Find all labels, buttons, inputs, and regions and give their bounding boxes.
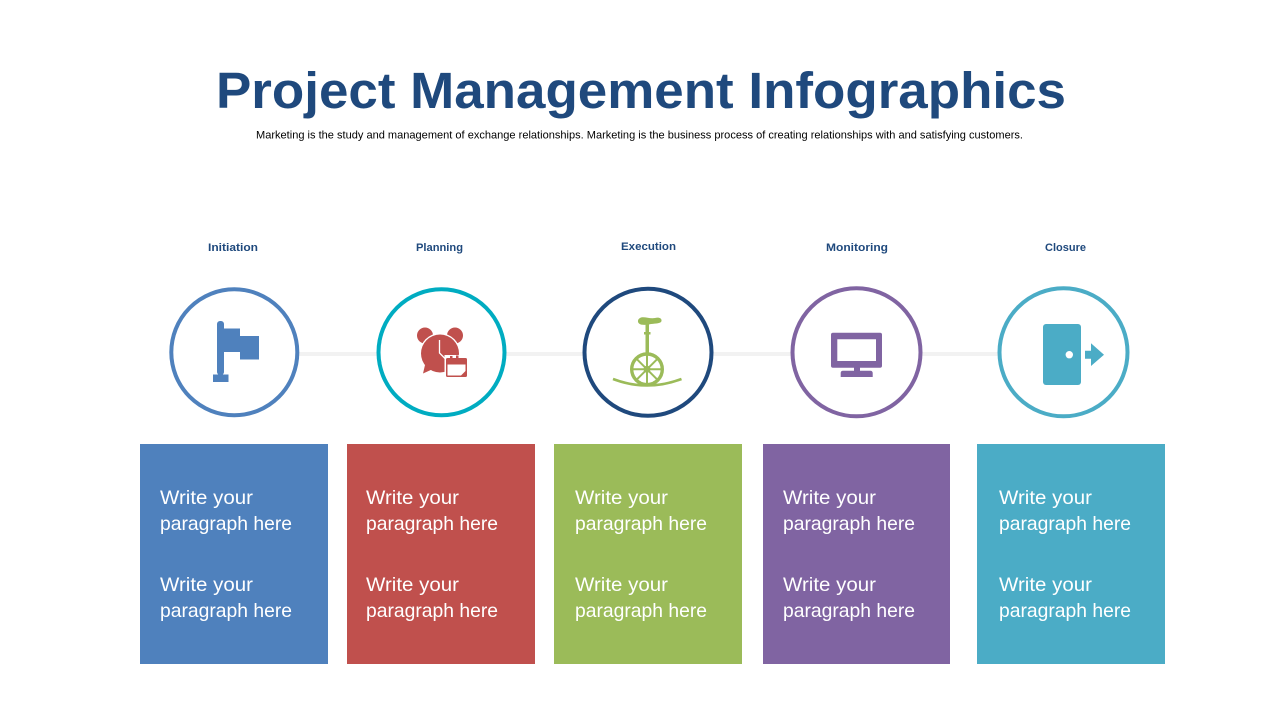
subtitle: Marketing is the study and management of exchange relationships. Marketing is the business process of creating relationships with and satisfying customers. (256, 130, 1023, 142)
card: Initiation (140, 444, 328, 664)
circle: Initiation (171, 289, 297, 415)
card: Planning (347, 444, 535, 664)
icon: alarm clock with calendar (417, 328, 468, 378)
card: Initiation: Write your (160, 487, 254, 509)
circle: Monitoring (792, 288, 920, 416)
card: Execution: Write your (575, 487, 669, 509)
circle: Planning (378, 289, 504, 415)
card: Monitoring: paragraph here (783, 600, 915, 622)
card: Monitoring: Write your (783, 487, 877, 509)
card: Closure: Write your (999, 574, 1093, 596)
icon: monitor (831, 333, 882, 377)
card: Closure: Write your (999, 487, 1093, 509)
step: Initiation (140, 242, 328, 664)
icon: unicycle (613, 317, 682, 386)
circle: Execution (584, 289, 712, 416)
title: Project Management Infographics (216, 62, 1066, 119)
step: Monitoring (763, 242, 950, 664)
card: Initiation: paragraph here (160, 513, 292, 535)
circle: Closure (1000, 288, 1128, 416)
card: Planning: Write your (366, 574, 460, 596)
card: Execution: paragraph here (575, 513, 707, 535)
step: Planning (347, 242, 535, 664)
card: Execution: Write your (575, 574, 669, 596)
connector line (299, 352, 999, 356)
card: Initiation: paragraph here (160, 600, 292, 622)
card: Monitoring: paragraph here (783, 513, 915, 535)
card: Planning: Write your (366, 487, 460, 509)
label: Execution: Execution (621, 241, 676, 253)
card: Closure (977, 444, 1165, 664)
card: Monitoring (763, 444, 950, 664)
icon: exit door (1043, 324, 1104, 385)
card: Initiation: Write your (160, 574, 254, 596)
card: Execution: paragraph here (575, 600, 707, 622)
card: Execution (554, 444, 742, 664)
label: Planning: Planning (416, 242, 463, 254)
card: Monitoring: Write your (783, 574, 877, 596)
card: Planning: paragraph here (366, 513, 498, 535)
label: Initiation: Initiation (208, 242, 258, 254)
card: Closure: paragraph here (999, 600, 1131, 622)
card: Planning: paragraph here (366, 600, 498, 622)
label: Monitoring: Monitoring (826, 242, 888, 254)
step: Execution (554, 241, 742, 664)
icon: flag (213, 321, 259, 382)
step: Closure (977, 242, 1165, 664)
card: Closure: paragraph here (999, 513, 1131, 535)
label: Closure: Closure (1045, 242, 1086, 254)
